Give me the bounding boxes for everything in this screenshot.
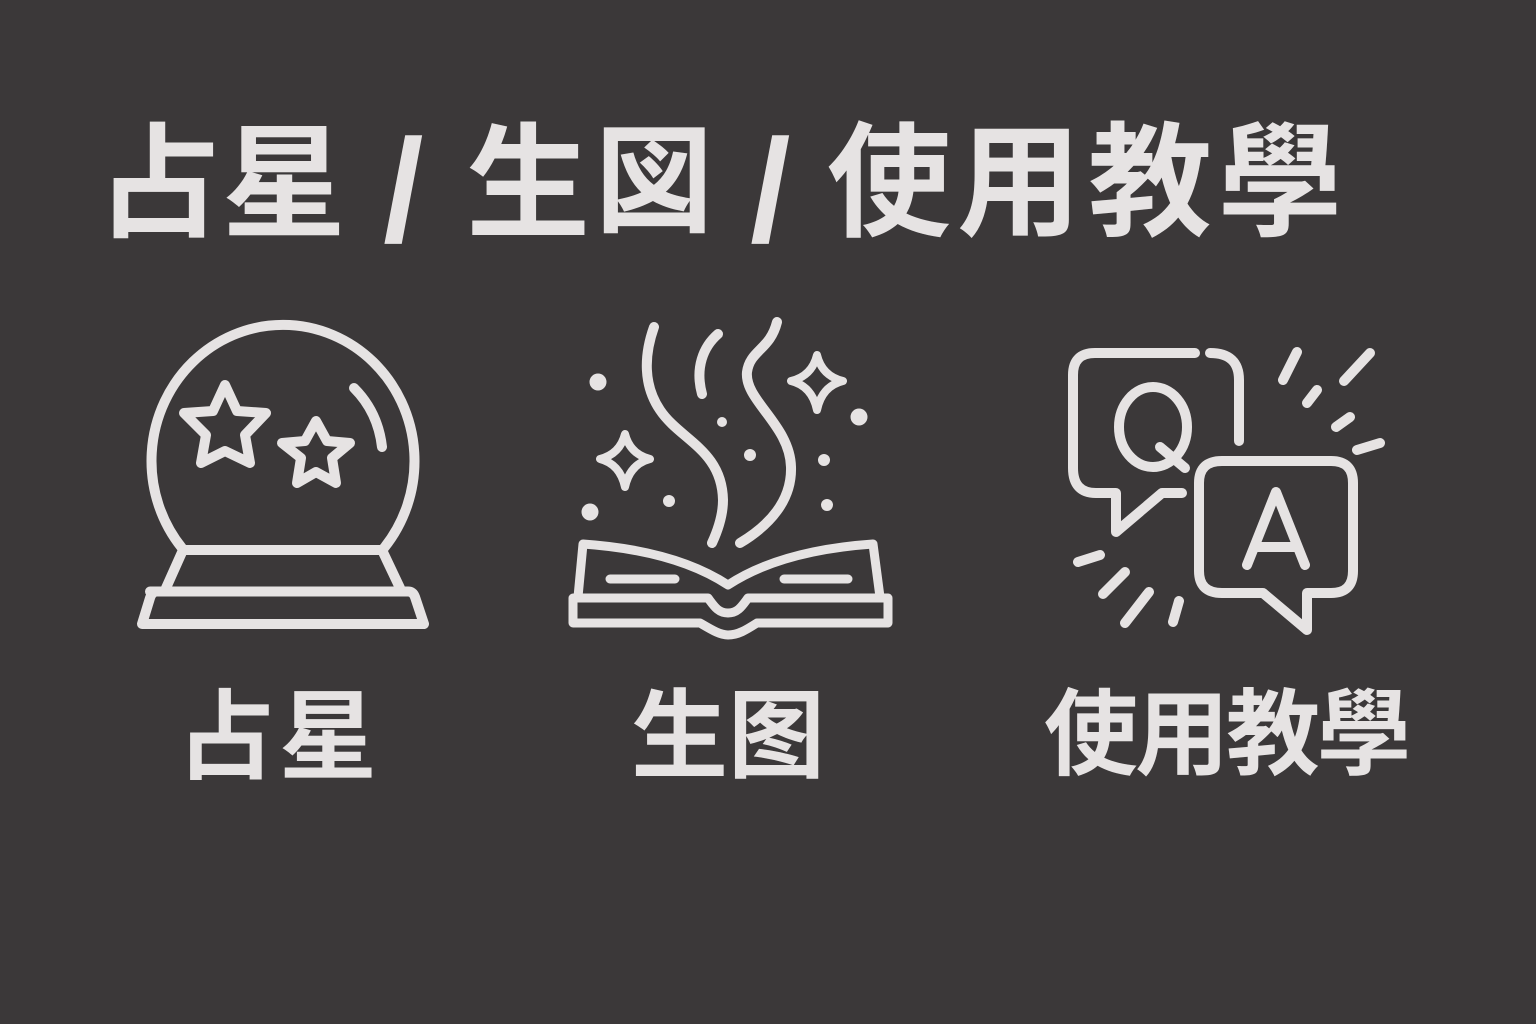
title: 生 xyxy=(466,116,590,254)
title xyxy=(97,109,1342,272)
title: 學 xyxy=(1218,115,1342,253)
label: 生图: 生图 xyxy=(631,682,825,791)
title: / xyxy=(750,109,791,272)
title: 星 xyxy=(222,116,346,254)
title: 用 xyxy=(957,115,1081,253)
title: / xyxy=(383,109,424,272)
label: 使用教學: 使用教學 xyxy=(1044,682,1408,787)
title: 占 xyxy=(97,116,221,254)
title: 図 xyxy=(595,117,713,249)
title: 教 xyxy=(1088,115,1212,253)
title: 使 xyxy=(827,115,951,253)
label: 占星: 占星 xyxy=(177,682,381,792)
